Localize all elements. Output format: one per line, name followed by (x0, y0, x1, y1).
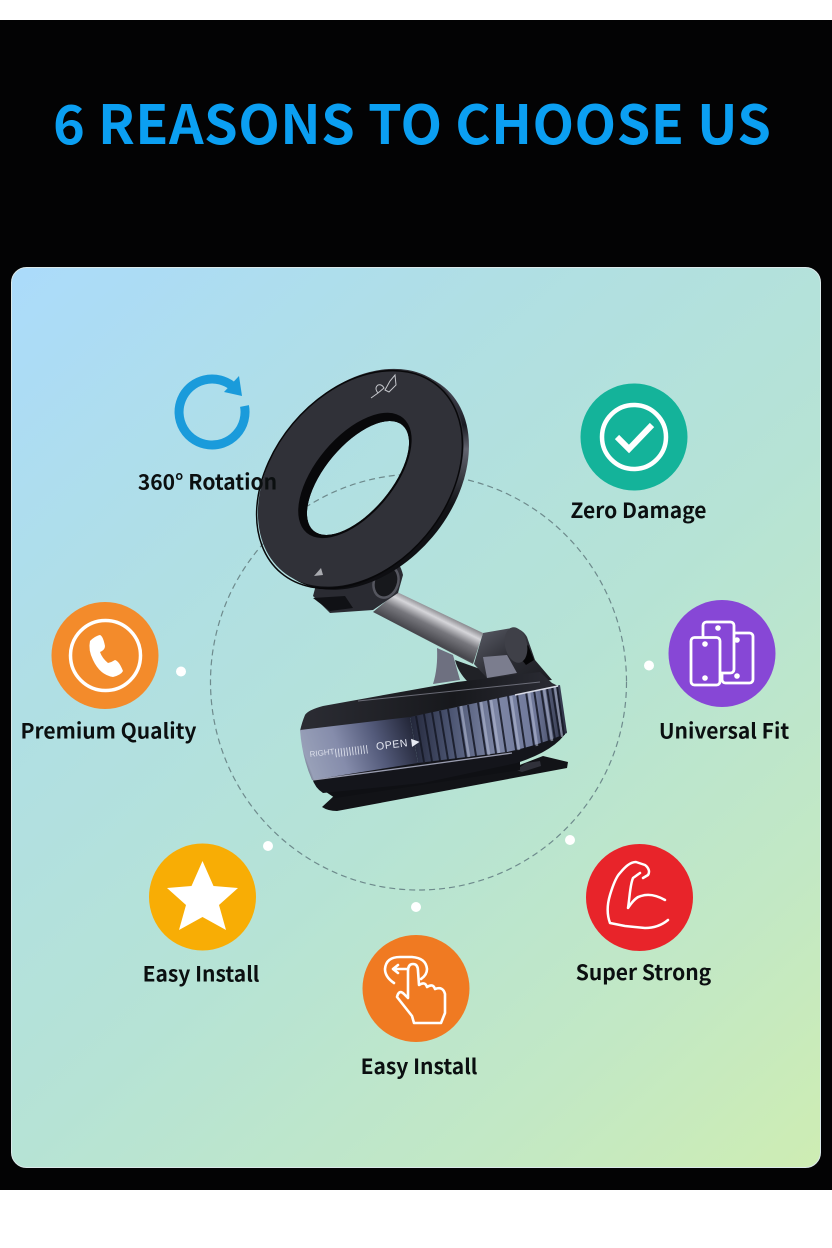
feature: super strong (576, 844, 712, 987)
feature: easy install star (143, 844, 260, 988)
back plate (433, 648, 460, 684)
mount block (455, 660, 490, 682)
hinge light face (483, 655, 517, 678)
panel: gradient card (12, 268, 820, 1168)
metal band (300, 717, 418, 780)
dashed orbit circle (210, 474, 626, 890)
knurled ring (410, 685, 567, 763)
ring face edge (214, 330, 505, 629)
feature: premium quality (21, 602, 196, 746)
suction foot (322, 756, 568, 811)
icon: phones circle (668, 600, 776, 707)
ring back rim (221, 331, 511, 630)
ring triangle mark (314, 568, 323, 576)
label: Premium Quality (21, 716, 196, 746)
label: 360° Rotation (138, 466, 277, 496)
orbit dots (176, 660, 654, 912)
foot tab (516, 761, 541, 772)
label: Universal Fit (659, 716, 789, 746)
knurl dark lines (416, 686, 564, 762)
band text: ticks: |||||||||||| (334, 743, 369, 757)
base lid (300, 672, 560, 731)
lip highlight (313, 753, 512, 780)
icon: check circle (580, 384, 688, 490)
label: Easy Install (361, 1051, 478, 1081)
icon: hand circle (362, 935, 470, 1042)
title: 6 REASONS TO CHOOSE US (53, 81, 771, 160)
hinge notch (518, 645, 534, 665)
ring inner bevel (277, 393, 433, 558)
band text: right: RIGHT (309, 747, 335, 759)
ring face (216, 328, 506, 627)
feature: easy install touch (361, 935, 478, 1081)
icon: muscle arm circle (586, 844, 693, 951)
hinge cap: base (501, 625, 531, 665)
ring logo mark (371, 375, 396, 398)
label: Zero Damage (571, 495, 706, 525)
label: Easy Install (143, 958, 260, 988)
feature: 360 rotation (138, 376, 277, 496)
label: Super Strong (576, 957, 712, 987)
hinge cap: ring (369, 563, 403, 601)
base hinge (474, 628, 552, 684)
icon: phone circle (52, 602, 158, 709)
band text: open: OPEN ▶ (375, 736, 421, 753)
knurl light ridges (461, 687, 562, 757)
lower lip (312, 731, 567, 793)
lid highlight (358, 682, 540, 701)
bracket under ring (313, 558, 403, 613)
icon: rotation arrow (179, 376, 245, 445)
icon: star circle (149, 844, 256, 950)
arm (373, 592, 483, 664)
product: magnetic phone mount (214, 328, 568, 811)
bracket slot (313, 596, 353, 611)
feature: zero damage (571, 384, 706, 525)
feature: universal fit (659, 600, 789, 746)
foot filler under body (323, 760, 520, 798)
knurl edge highlight (515, 686, 558, 695)
